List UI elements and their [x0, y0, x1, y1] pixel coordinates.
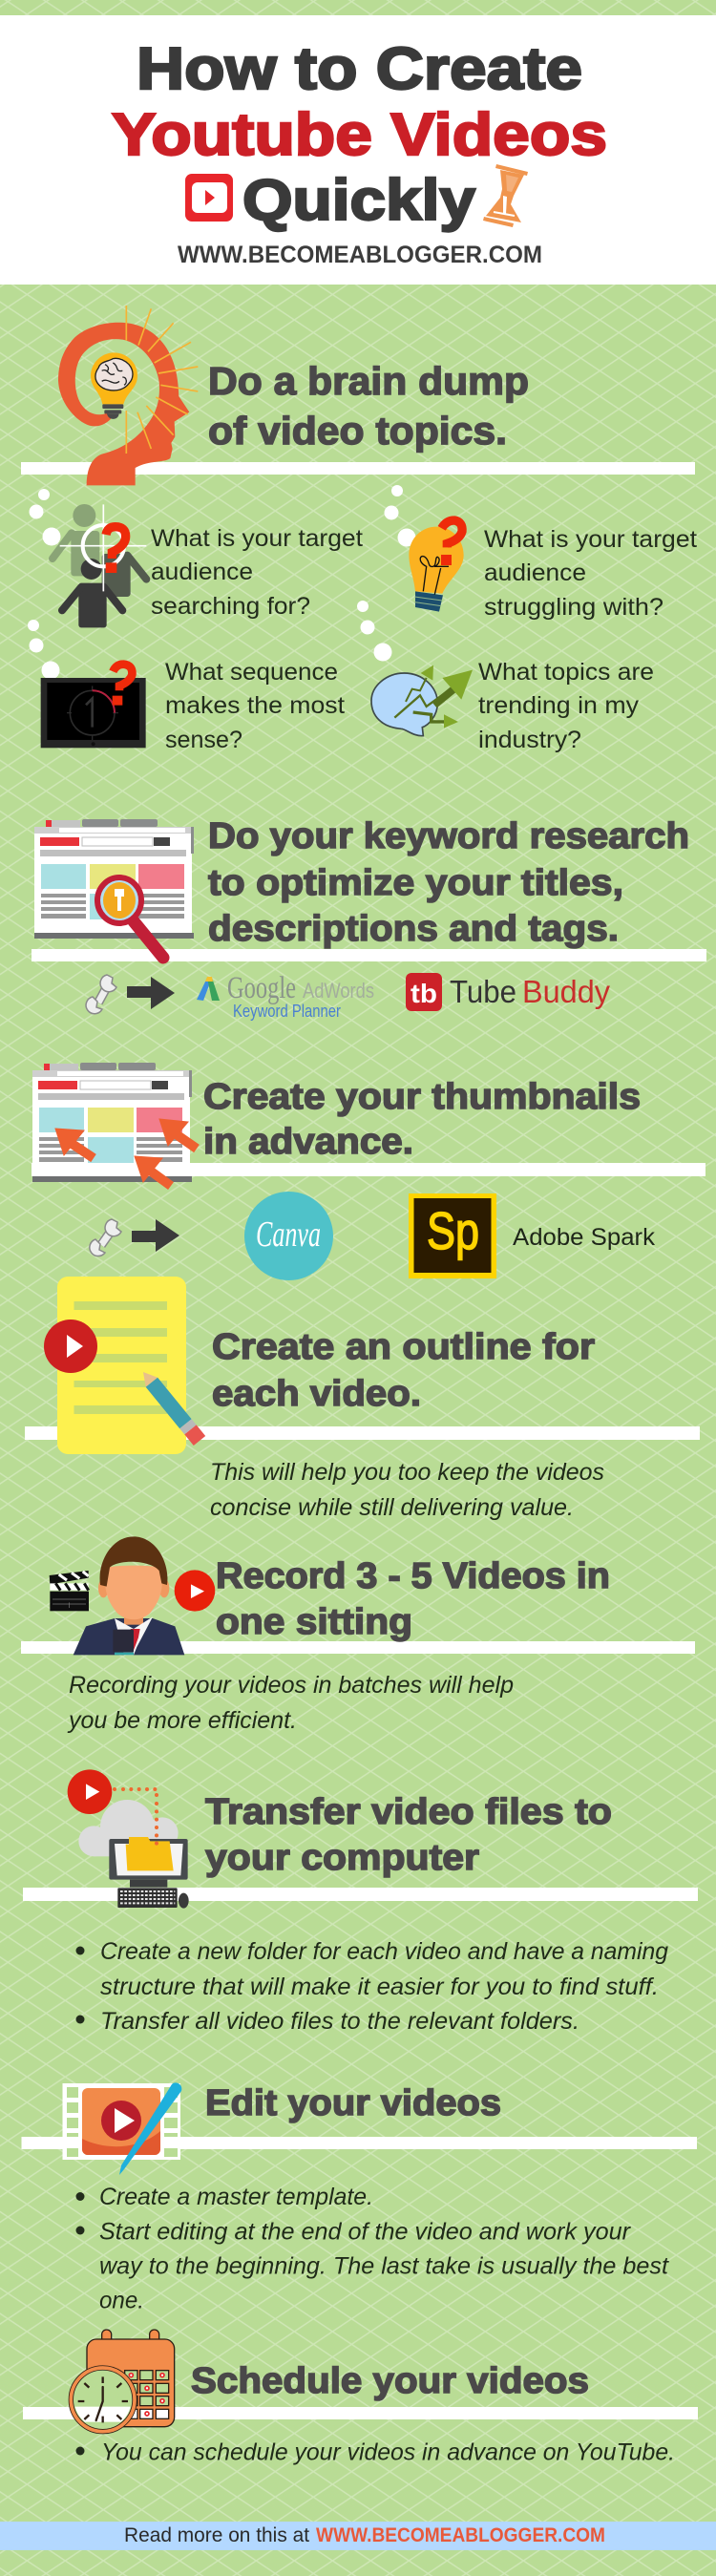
text: record note — [67, 1672, 514, 1734]
heading: thumbnails: Create your thumbnails — [203, 1077, 641, 1117]
logo: tubebuddy: Tube — [450, 974, 516, 1009]
text: outline note: concise while still delivering value. — [210, 1494, 574, 1521]
label: adobe spark: Adobe Spark — [513, 1224, 656, 1251]
logo: tubebuddy: tb — [411, 979, 437, 1008]
footer text — [124, 2524, 605, 2546]
footer text: Read more on this at — [124, 2524, 309, 2546]
text: target audience searching: searching for? — [151, 593, 310, 620]
divider 4 — [25, 1426, 700, 1440]
tools row: thumbnails — [90, 1192, 656, 1280]
icon: yellow note — [44, 1277, 205, 1454]
logo: tubebuddy — [406, 973, 610, 1011]
logo: canva — [244, 1192, 333, 1280]
heading: outline: Create an outline for — [212, 1327, 595, 1367]
heading: record: Record 3 - 5 Videos in — [216, 1556, 610, 1596]
heading: record: one sitting — [216, 1602, 412, 1642]
heading: outline — [212, 1327, 595, 1414]
footer band — [0, 2522, 716, 2550]
icon: target audience — [53, 504, 146, 627]
logo: tubebuddy: Buddy — [522, 974, 610, 1009]
icon: wrench — [86, 975, 116, 1014]
icon: film with pen — [63, 2082, 181, 2175]
list: edit tips: one. — [99, 2288, 144, 2314]
heading: brain dump: of video topics. — [208, 409, 507, 453]
list: transfer tips: Transfer all video files to the relevant folders. — [100, 2008, 579, 2035]
heading: outline: each video. — [212, 1374, 421, 1414]
section 6: transfer — [23, 1769, 698, 2035]
icon: light bulb question — [409, 520, 464, 612]
heading: keyword research: descriptions and tags. — [208, 909, 619, 949]
icon: browser with arrows — [32, 1063, 197, 1186]
section 4: outline — [25, 1277, 700, 1521]
list: edit tips — [76, 2184, 669, 2314]
heading: brain dump — [208, 359, 529, 453]
icon: arrow — [132, 1219, 179, 1252]
divider 5 — [21, 1641, 695, 1654]
section 7: edit — [21, 2082, 697, 2314]
icon: calendar and clock — [67, 2330, 175, 2432]
list: transfer tips: Create a new folder for each video and have a naming — [100, 1938, 668, 1965]
thought dots — [28, 485, 416, 680]
section 1: brain dump — [21, 306, 695, 485]
section 2: keyword research — [32, 816, 706, 961]
divider 3 — [32, 1163, 705, 1176]
text: target audience searching: What is your target — [151, 525, 363, 552]
text: target audience struggling: What is your target — [484, 526, 697, 553]
heading: thumbnails: in advance. — [203, 1122, 413, 1162]
heading: thumbnails — [203, 1077, 641, 1162]
text: target audience struggling: audience — [484, 560, 586, 586]
section 3: thumbnails — [32, 1063, 705, 1186]
divider 2 — [32, 949, 706, 961]
heading: transfer: your computer — [205, 1838, 479, 1878]
list: edit tips: Create a master template. — [99, 2184, 373, 2210]
title line 2: Youtube Videos — [112, 102, 607, 168]
text: sequence: sense? — [165, 727, 242, 753]
heading: keyword research: to optimize your titles, — [208, 863, 623, 903]
text: target audience struggling — [484, 526, 697, 621]
text: record note: you be more efficient. — [67, 1707, 297, 1734]
logo: canva: Canva — [256, 1214, 321, 1255]
heading: record — [216, 1556, 610, 1642]
text: trending topics: What topics are — [478, 659, 654, 686]
divider 7 — [21, 2137, 697, 2149]
text: sequence: What sequence — [165, 659, 338, 686]
title line 1: How to Create — [137, 36, 582, 102]
logo: google adwords — [197, 971, 374, 1021]
text: outline note — [210, 1459, 604, 1521]
heading: schedule: Schedule your videos — [191, 2361, 589, 2401]
list: edit tips: way to the beginning. The last take is usually the best — [99, 2253, 669, 2280]
logo: adobe spark: Sp — [427, 1201, 479, 1260]
logo: google adwords: Keyword Planner — [233, 1002, 341, 1021]
list: transfer tips — [76, 1938, 668, 2035]
header panel — [0, 15, 716, 285]
section 8: schedule — [23, 2330, 698, 2465]
logo: google adwords: Google — [227, 971, 296, 1005]
icon: tablet countdown — [41, 665, 146, 748]
heading: keyword research — [208, 816, 689, 949]
section 5: record — [21, 1536, 695, 1734]
text: trending topics — [478, 659, 654, 753]
footer text: WWW.BECOMEABLOGGER.COM — [316, 2524, 605, 2546]
text: sequence — [165, 659, 345, 753]
heading: edit: Edit your videos — [205, 2083, 501, 2123]
title line 3: Quickly — [242, 168, 476, 232]
text: trending topics: trending in my — [478, 692, 640, 719]
text: sequence: makes the most — [165, 692, 345, 719]
logo: adobe spark — [409, 1193, 496, 1278]
text: trending topics: industry? — [478, 727, 581, 753]
divider 6 — [23, 1888, 698, 1901]
list: schedule tip: You can schedule your videos in advance on YouTube. — [101, 2439, 675, 2465]
text: target audience searching: audience — [151, 559, 253, 585]
icon: browser with magnifier — [34, 819, 194, 958]
icon: head with light bulb — [58, 306, 198, 485]
divider 1 — [21, 462, 695, 475]
icon: youtube button — [185, 174, 233, 222]
list: transfer tips: structure that will make it easier for you to find stuff. — [100, 1974, 659, 2000]
icon: wrench — [90, 1219, 121, 1256]
logo: google adwords: AdWords — [303, 979, 374, 1003]
heading: transfer — [205, 1792, 612, 1878]
icon: presenter — [50, 1536, 215, 1655]
divider 8 — [23, 2407, 698, 2419]
text: record note: Recording your videos in batches will help — [69, 1672, 514, 1699]
icon: trending chat bubble — [371, 665, 473, 736]
icon: hourglass — [483, 164, 528, 227]
text: outline note: This will help you too keep the videos — [210, 1459, 604, 1486]
website url: WWW.BECOMEABLOGGER.COM — [178, 242, 542, 268]
heading: transfer: Transfer video files to — [205, 1792, 612, 1832]
tools row: keyword research — [86, 971, 610, 1021]
text: target audience searching — [151, 525, 363, 620]
list: edit tips: Start editing at the end of the video and work your — [99, 2219, 632, 2246]
heading: brain dump: Do a brain dump — [208, 359, 529, 403]
text: target audience struggling: struggling with? — [484, 594, 663, 621]
icon: cloud to computer — [68, 1769, 189, 1909]
icon: arrow — [127, 977, 175, 1009]
heading: keyword research: Do your keyword research — [208, 816, 689, 856]
